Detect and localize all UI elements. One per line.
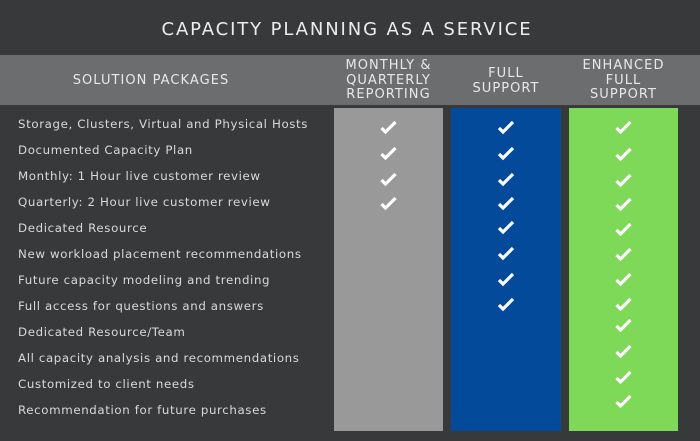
column: full support xyxy=(451,108,561,431)
title: CAPACITY PLANNING AS A SERVICE xyxy=(162,18,532,40)
heading: monthly and quarterly reporting: QUARTERLY xyxy=(346,72,431,88)
feature: customized: Customized to client needs xyxy=(18,377,195,391)
heading: monthly and quarterly reporting xyxy=(345,58,432,102)
feature: dedicated team: Dedicated Resource/Team xyxy=(18,325,185,339)
feature: quarterly review: Quarterly: 2 Hour live customer review xyxy=(18,195,271,209)
heading: monthly and quarterly reporting: REPORTING xyxy=(346,87,431,102)
feature: storage: Storage, Clusters, Virtual and Physical Hosts xyxy=(18,117,308,131)
column: monthly and quarterly reporting xyxy=(334,108,443,431)
heading: solution packages: SOLUTION PACKAGES xyxy=(73,73,229,88)
heading: full support: SUPPORT xyxy=(472,80,540,96)
panel: feature list xyxy=(18,117,308,417)
feature: capacity plan: Documented Capacity Plan xyxy=(18,143,193,157)
heading: monthly and quarterly reporting: MONTHLY & xyxy=(345,58,432,73)
heading: full support xyxy=(472,66,540,96)
feature: capacity analysis: All capacity analysis and recommendations xyxy=(18,351,300,365)
heading: enhanced full support xyxy=(582,58,665,102)
column: enhanced full support xyxy=(569,108,678,431)
feature: capacity modeling: Future capacity modeling and trending xyxy=(18,273,270,287)
header band xyxy=(0,55,700,105)
heading: full support: FULL xyxy=(488,66,524,81)
heading: enhanced full support: SUPPORT xyxy=(590,87,657,102)
heading: enhanced full support: ENHANCED xyxy=(582,58,665,73)
feature: monthly review: Monthly: 1 Hour live customer review xyxy=(18,169,261,183)
heading: enhanced full support: FULL xyxy=(606,72,641,88)
feature: dedicated resource: Dedicated Resource xyxy=(18,221,147,235)
feature: questions and answers: Full access for questions and answers xyxy=(18,299,264,313)
feature: workload placement: New workload placement recommendations xyxy=(18,247,302,261)
feature: future purchases: Recommendation for future purchases xyxy=(18,403,267,417)
